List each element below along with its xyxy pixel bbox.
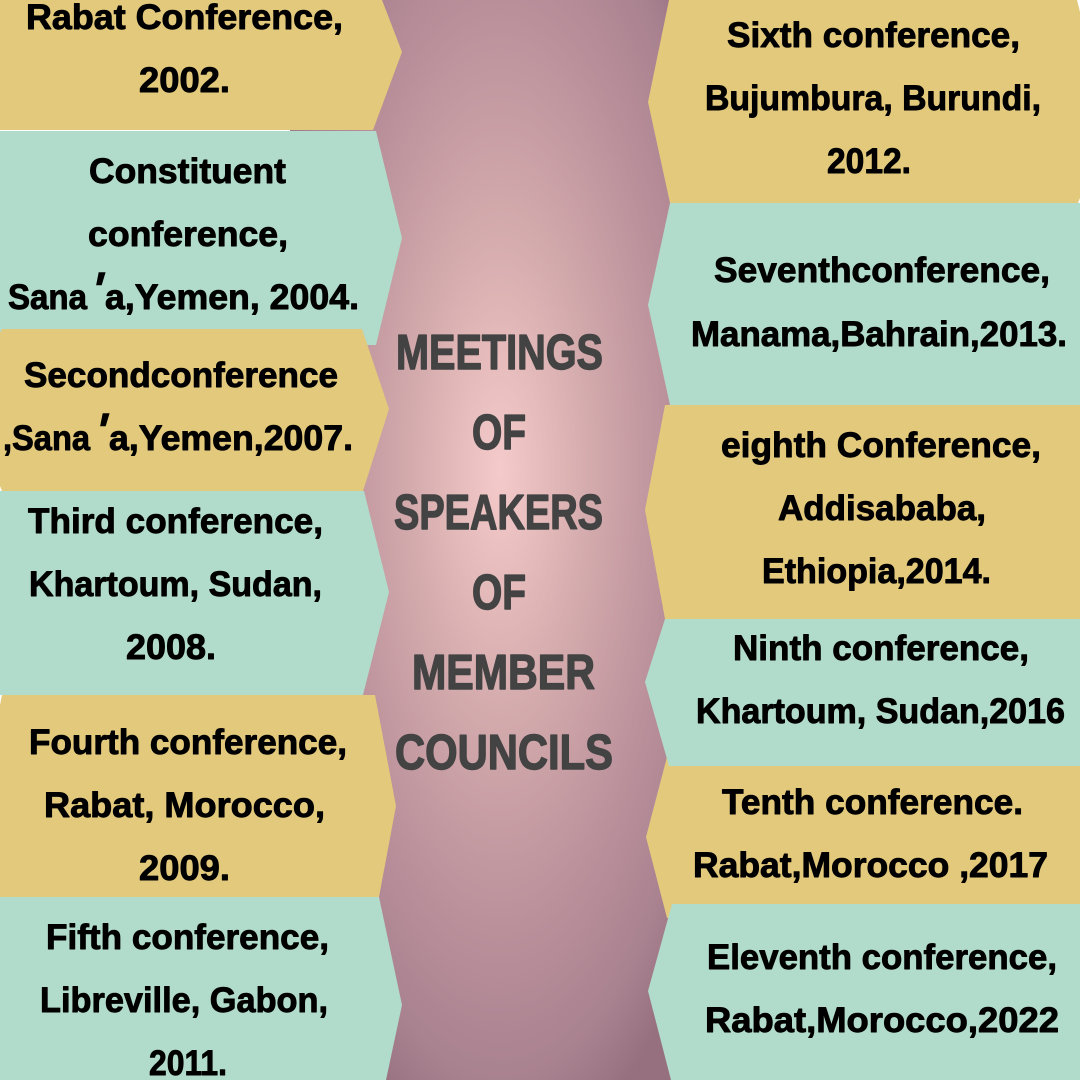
- left arrow: Rabat Conference 2002: [0, 0, 402, 130]
- left arrow: Fifth conference 2011: Fifth conference,: [46, 918, 329, 957]
- right arrow: Ninth conference 2016: Ninth conference,: [733, 629, 1029, 668]
- left arrow: Third conference 2008: Khartoum, Sudan,: [29, 565, 322, 604]
- title: SPEAKERS: [394, 486, 603, 540]
- title: OF: [472, 566, 526, 620]
- left arrow: Constituent conference 2004: Constituent: [89, 152, 286, 191]
- left arrow: Constituent conference 2004: [0, 131, 402, 345]
- left arrow: Second conference 2007: ʹ: [88, 403, 115, 461]
- title: MEMBER: [412, 646, 595, 700]
- right arrow: Sixth conference 2012: Sixth conference,: [727, 16, 1020, 55]
- left arrow: Fourth conference 2009: Fourth conference,: [29, 723, 347, 762]
- left arrow: Second conference 2007: [0, 329, 389, 491]
- right arrow: eighth Conference 2014: Addisababa,: [778, 489, 986, 528]
- right arrow: Sixth conference 2012: [648, 0, 1080, 203]
- right arrow: eighth Conference 2014: Ethiopia,2014.: [762, 552, 991, 591]
- right arrow: Eleventh conference 2022: Eleventh conference,: [707, 938, 1057, 977]
- left arrow: Fourth conference 2009: [0, 695, 396, 897]
- right arrow: Ninth conference 2016: [645, 619, 1080, 766]
- left arrow: Fifth conference 2011: [0, 897, 402, 1080]
- right arrow: eighth Conference 2014: [645, 405, 1080, 619]
- right arrow: Seventh conference 2013: [648, 203, 1080, 405]
- title: COUNCILS: [395, 726, 613, 780]
- right arrow: Tenth conference 2017: Rabat,Morocco ,2017: [693, 846, 1048, 885]
- central gradient background: [290, 0, 790, 1080]
- title: OF: [472, 406, 526, 460]
- right arrow: eighth Conference 2014: eighth Conference,: [721, 426, 1041, 465]
- right arrow: Seventh conference 2013: Seventhconference,: [714, 251, 1050, 290]
- title: [394, 326, 613, 780]
- left arrow: Fourth conference 2009: 2009.: [139, 849, 230, 888]
- left arrow: Constituent conference 2004: Sana: [8, 278, 88, 317]
- left arrow: Constituent conference 2004: a,Yemen, 2004.: [105, 278, 359, 317]
- right arrow: Sixth conference 2012: Bujumbura, Burundi,: [705, 79, 1041, 118]
- right arrow: Eleventh conference 2022: Rabat,Morocco,2022: [705, 1001, 1059, 1040]
- left arrow: Third conference 2008: Third conference,: [28, 502, 323, 541]
- left arrow: Constituent conference 2004: ʹ: [84, 262, 111, 320]
- left arrow: Third conference 2008: [0, 491, 389, 695]
- right arrow: Tenth conference 2017: [646, 757, 1080, 918]
- right arrow: Tenth conference 2017: Tenth conference.: [722, 783, 1023, 822]
- title: MEETINGS: [396, 326, 603, 380]
- left arrow: Constituent conference 2004: conference,: [88, 215, 288, 254]
- right arrow: Eleventh conference 2022: [648, 904, 1080, 1080]
- left arrow: Fourth conference 2009: Rabat, Morocco,: [44, 786, 325, 825]
- right arrow: Ninth conference 2016: Khartoum, Sudan,2016: [696, 692, 1065, 731]
- left arrow: Third conference 2008: 2008.: [126, 628, 216, 667]
- left arrow: Second conference 2007: ,Sana: [3, 419, 90, 458]
- left arrow: Second conference 2007: Secondconference: [24, 356, 338, 395]
- right arrow: Sixth conference 2012: 2012.: [827, 142, 911, 181]
- left arrow: Rabat Conference 2002: 2002.: [139, 61, 230, 100]
- right arrow: Seventh conference 2013: Manama,Bahrain,2013.: [691, 315, 1067, 354]
- left arrow: Second conference 2007: a,Yemen,2007.: [109, 419, 353, 458]
- left arrow: Fifth conference 2011: Libreville, Gabon,: [40, 981, 328, 1020]
